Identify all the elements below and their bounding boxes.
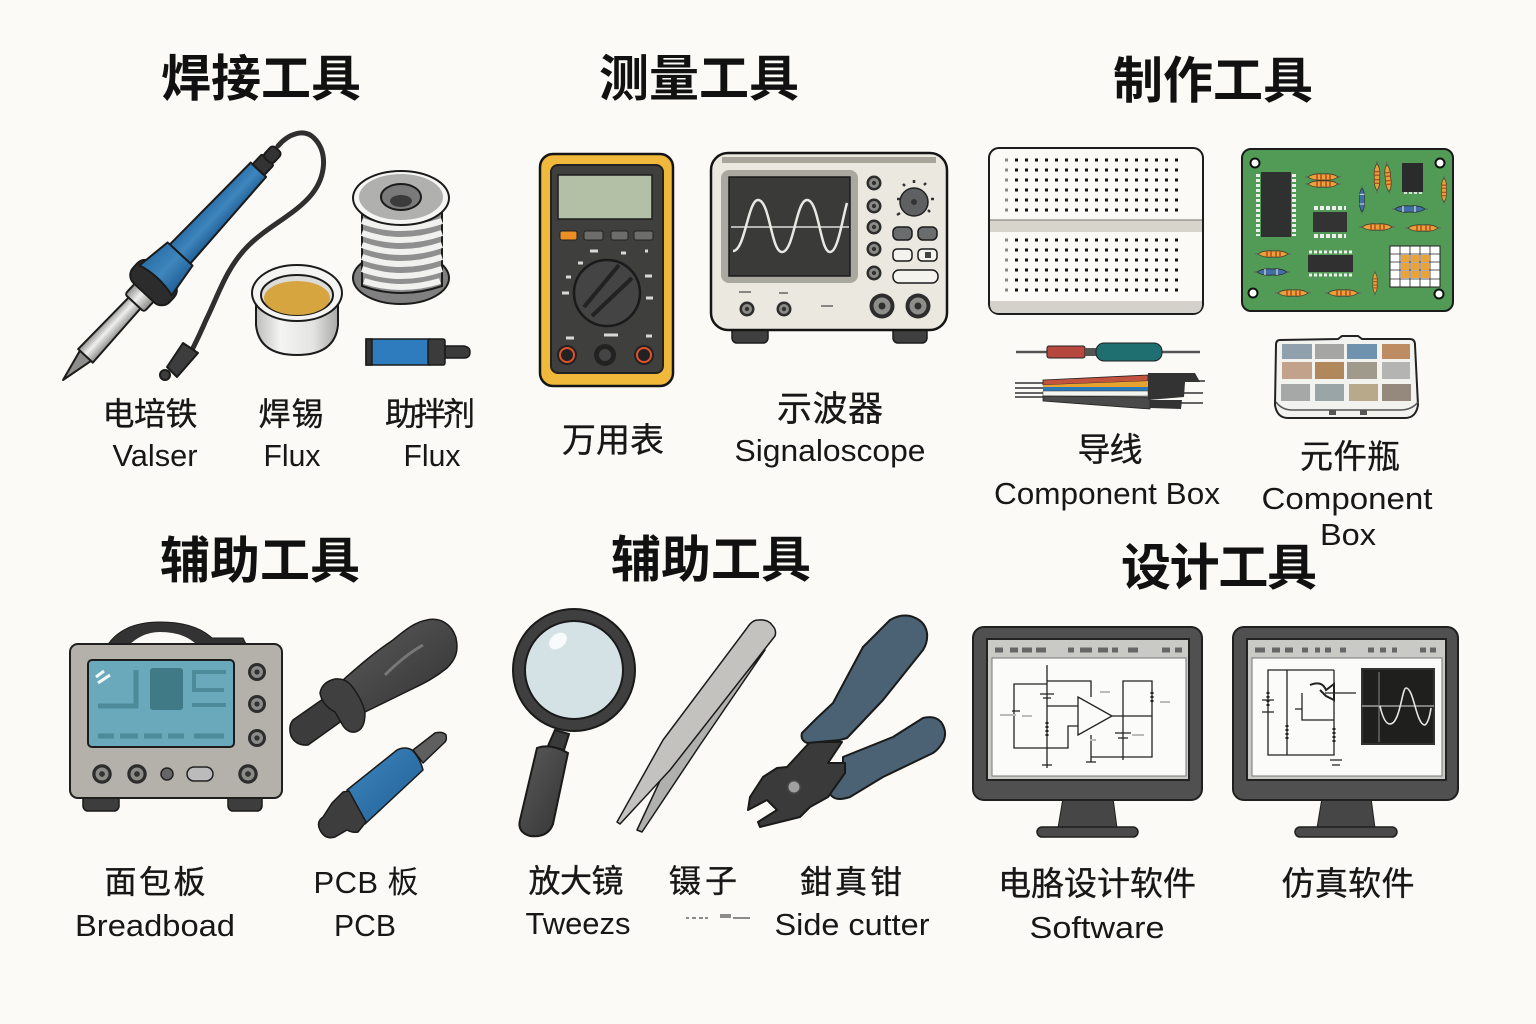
label: component box: Box [1320, 517, 1377, 552]
label: PCB board: PCB 板 [314, 865, 418, 900]
heading: auxiliary tools center: 辅助工具 [611, 532, 811, 588]
label: soldering iron [102, 396, 198, 473]
heading: making tools: 制作工具 [1113, 53, 1313, 109]
panel: design tools [973, 540, 1458, 945]
icon: jumper wires [1015, 343, 1205, 409]
label: flux [385, 396, 475, 473]
panel: measuring tools [540, 51, 947, 468]
icon: flux tube [366, 339, 470, 365]
label: circuit design software [998, 865, 1196, 945]
label: flux: Flux [404, 438, 461, 473]
label: wires: Component Box [994, 476, 1220, 511]
icon: monitor with schematic [973, 627, 1202, 837]
icon: side cutter [748, 616, 945, 827]
label: solder [258, 396, 324, 473]
icon: component box [1275, 336, 1418, 418]
heading: measuring tools: 测量工具 [599, 51, 799, 107]
label: soldering iron: 电培铁 [102, 396, 198, 432]
icon: monitor with simulation [1233, 627, 1458, 837]
heading: soldering tools: 焊接工具 [161, 51, 361, 107]
icon: small blue screwdriver [319, 732, 446, 838]
label: component box: Component [1262, 481, 1433, 516]
label: side cutter: Side cutter [774, 907, 930, 942]
label: simulation software: 仿真软件 [1282, 865, 1414, 902]
label: multimeter: 万用表 [562, 422, 664, 460]
label: magnifier: Tweezs [526, 906, 630, 941]
label: soldering iron: Valser [112, 438, 198, 473]
label: component box: 元仵瓶 [1300, 438, 1400, 475]
label: oscilloscope: Signaloscope [734, 433, 926, 468]
icon: PCB [1242, 149, 1453, 311]
label: tweezers: 镊子 [669, 863, 737, 899]
label: flux: 助拌剂 [385, 396, 475, 432]
label: side cutter: 鉗真钳 [800, 864, 902, 900]
label: solder: Flux [264, 438, 321, 473]
icon: tweezers [617, 620, 776, 832]
label: solder: 焊锡 [258, 396, 324, 432]
label: magnifier [526, 863, 630, 941]
icon: oscilloscope [711, 153, 947, 343]
label: oscilloscope [734, 390, 926, 468]
icon: solder wire spool [353, 171, 449, 304]
label: PCB board [314, 865, 418, 943]
panel: soldering tools [45, 51, 475, 473]
label: circuit design software: Software [1030, 910, 1164, 945]
icon: instrument device [70, 622, 282, 811]
label: oscilloscope: 示波器 [777, 390, 883, 429]
icon: multimeter [540, 154, 673, 386]
icon: breadboard [989, 148, 1203, 314]
label: side cutter [774, 864, 930, 942]
small garbled marks [686, 915, 750, 918]
label: magnifier: 放大镜 [528, 863, 624, 899]
label: wires [994, 431, 1220, 511]
icon: soldering iron [45, 132, 324, 397]
panel: auxiliary tools center [513, 532, 945, 942]
icon: large screwdriver handle [290, 619, 457, 745]
label: PCB board: PCB [334, 908, 396, 943]
icon: magnifying glass [513, 609, 635, 836]
icon: solder cup [252, 265, 342, 355]
heading: auxiliary tools left: 辅助工具 [160, 533, 360, 589]
panel: making tools [989, 53, 1453, 552]
label: breadboard: Breadboad [75, 908, 235, 943]
label: circuit design software: 电胳设计软件 [998, 865, 1196, 902]
label: breadboard [75, 864, 235, 943]
panel: auxiliary tools left [70, 533, 457, 943]
label: wires: 导线 [1078, 431, 1142, 468]
label: breadboard: 面包板 [104, 864, 206, 900]
heading: design tools: 设计工具 [1121, 540, 1317, 596]
label: component box [1262, 438, 1433, 552]
